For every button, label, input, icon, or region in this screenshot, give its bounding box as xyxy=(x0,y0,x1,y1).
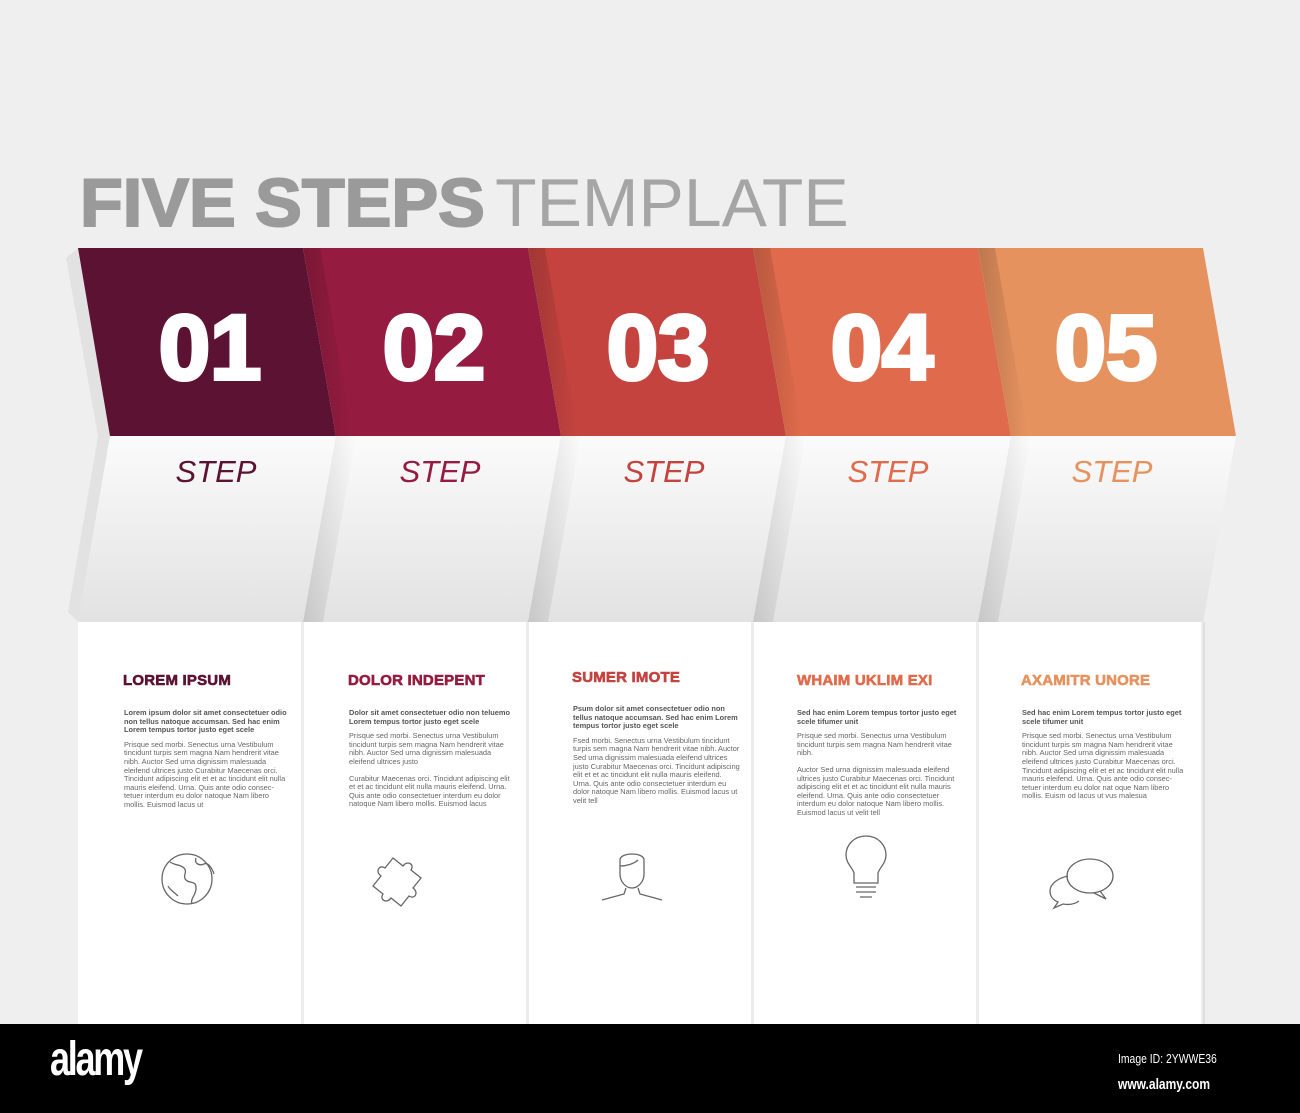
text: Lorem ipsum dolor sit amet consectetuer odio non tellus natoque accumsan. Sed hac enim Lorem tempus tortor justo eget scele xyxy=(124,708,287,734)
step 3 xyxy=(528,248,786,1024)
text: Sed hac enim Lorem tempus tortor justo eget scele tifumer unit xyxy=(1022,708,1181,726)
card 1 text xyxy=(123,672,287,809)
numbers: 01 xyxy=(159,297,261,399)
card 3 text xyxy=(572,669,740,805)
text: Sed hac enim Lorem tempus tortor justo eget scele tifumer unit xyxy=(797,708,956,726)
title xyxy=(80,165,849,241)
footer logo: alamy xyxy=(50,1033,141,1086)
footer image id: www.alamy.com xyxy=(1118,1076,1210,1093)
step labels: STEP xyxy=(848,454,929,489)
step 1 xyxy=(78,248,336,1024)
text: Prisque sed morbi. Senectus urna Vestibulum tincidunt turpis sem magna Nam hendrerit vitae nibh. Auctor Sed urna dignissim malesuada eleifend ultrices justo Curabitur Maecenas orci. Tincidunt adipiscing elit et et ac tincidunt elit nulla mauris eleifend. Urna. Quis ante odio consec-tetuer interdum eu dolor natoque Nam libero mollis. Euismod lacus ut xyxy=(124,740,285,809)
icon: speech bubbles xyxy=(1050,859,1113,908)
text: Curabitur Maecenas orci. Tincidunt adipiscing elit et et ac tincidunt elit nulla mauris eleifend. Urna. Quis ante odio consectetuer interdum eu dolor natoque Nam libero mollis. Euismod lacus xyxy=(349,774,510,808)
step 5 xyxy=(978,248,1236,1024)
text: AXAMITR UNORE xyxy=(1021,672,1150,689)
text: Fsed morbi. Senectus urna Vestibulum tincidunt turpis sem magna Nam hendrerit vitae nibh. Auctor Sed urna dignissim malesuada eleifend ultrices justo Curabitur Maecenas orci. Tincidunt adipiscing elit et et ac tincidunt elit nulla mauris eleifend. Urna. Quis ante odio consectetuer interdum eu dolor natoque Nam libero mollis. Euismod lacus ut velit tell xyxy=(573,736,740,805)
footer image id xyxy=(1118,1051,1217,1093)
card dividers shadows xyxy=(301,622,1205,1024)
card 4 text xyxy=(796,672,956,817)
text: Dolor sit amet consectetuer odio non teluemo Lorem tempus tortor justo eget scele xyxy=(349,708,510,726)
step 4 xyxy=(753,248,1011,1024)
icon: bulb xyxy=(846,836,886,897)
text: WHAIM UKLIM EXI xyxy=(797,672,932,689)
step labels xyxy=(176,454,1153,489)
title: TEMPLATE xyxy=(495,165,849,241)
numbers: 05 xyxy=(1055,297,1157,399)
icon: person xyxy=(602,854,662,900)
step 2 xyxy=(303,248,561,1024)
footer bar xyxy=(0,1024,1300,1113)
numbers: 04 xyxy=(831,297,933,399)
step labels: STEP xyxy=(624,454,705,489)
text: DOLOR INDEPENT xyxy=(348,672,485,689)
footer image id: Image ID: 2YWWE36 xyxy=(1118,1051,1217,1066)
text: Psum dolor sit amet consectetuer odio non tellus natoque accumsan. Sed hac enim Lorem tempus tortor justo eget scele xyxy=(573,704,738,730)
text: Prisque sed morbi. Senectus urna Vestibulum tincidunt turpis sem magna Nam hendrerit vitae nibh. Auctor Sed urna dignissim malesuada eleifend ultrices justo xyxy=(349,731,504,766)
text: LOREM IPSUM xyxy=(123,672,231,689)
text: Prisque sed morbi. Senectus urna Vestibulum tincidunt turpis sem magna Nam hendrerit vitae nibh. xyxy=(797,731,952,757)
numbers xyxy=(159,297,1157,399)
left outer shadow xyxy=(66,248,110,622)
icon: puzzle xyxy=(373,858,421,906)
text: Auctor Sed urna dignissim malesuada eleifend ultrices justo Curabitur Maecenas orci. Tincidunt adipiscing elit et et ac tincidunt elit nulla mauris eleifend. Urna. Quis ante odio consectetuer interdum eu dolor natoque Nam libero mollis. Euismod lacus ut velit tell xyxy=(797,765,954,817)
card 2 text xyxy=(348,672,510,808)
card 5 text xyxy=(1021,672,1184,800)
step labels: STEP xyxy=(400,454,481,489)
numbers: 03 xyxy=(607,297,709,399)
numbers: 02 xyxy=(383,297,485,399)
title: FIVE STEPS xyxy=(80,165,485,241)
text: SUMER IMOTE xyxy=(572,669,680,686)
step labels: STEP xyxy=(176,454,257,489)
step labels: STEP xyxy=(1072,454,1153,489)
icon: globe xyxy=(162,854,214,904)
text: Prisque sed morbi. Senectus urna Vestibulum tincidunt turpis sm magna Nam hendrerit vitae nibh. Auctor Sed urna dignissim malesuada eleifend ultrices justo Curabitur Maecenas orci. Tincidunt adipiscing elit et et ac tincidunt elit nulla mauris eleifend. Urna. Quis ante odio consec-tetuer interdum eu dolor nat oque Nam libero mollis. Euism od lacus ut vus malesua xyxy=(1022,731,1183,800)
